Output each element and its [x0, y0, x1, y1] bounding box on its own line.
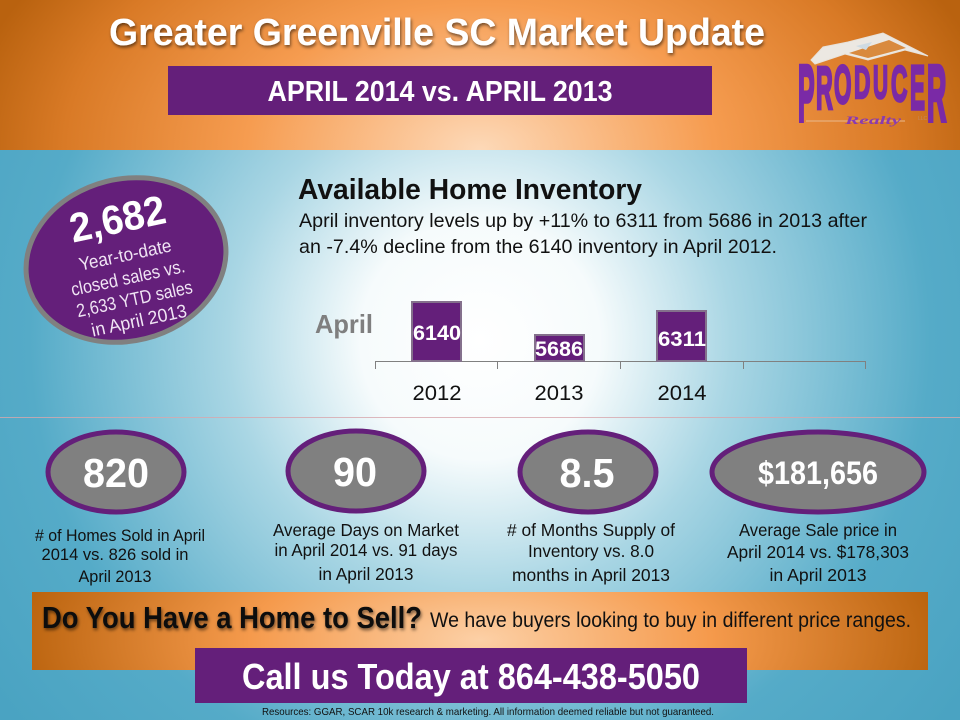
callout text: 2,633 YTD sales	[75, 276, 194, 321]
bar 2012: 6140	[413, 322, 461, 345]
callout text	[64, 232, 199, 343]
bar chart: April inventory	[375, 302, 866, 405]
year labels: 2012	[412, 382, 462, 405]
callout oval: YTD closed sales	[8, 157, 244, 363]
stat: average sale price	[712, 432, 924, 585]
callout text: in April 2013	[89, 300, 189, 340]
heading: available home inventory: Available Home Inventory	[298, 174, 642, 206]
stat: homes sold: 820	[83, 450, 149, 496]
stat: average sale price: $181,656	[758, 455, 878, 491]
banner heading: Do You Have a Home to Sell?	[42, 600, 422, 635]
inventory description: an -7.4% decline from the 6140 inventory in April 2012.	[299, 236, 777, 258]
logo: Producer Realty	[798, 33, 946, 139]
callout text: Year-to-date	[77, 235, 173, 275]
big number: 2,682	[65, 186, 170, 251]
logo: Producer Realty: D	[854, 56, 870, 108]
stat: days on market: Average Days on Market	[273, 520, 459, 540]
stat: homes sold: April 2013	[78, 567, 152, 586]
callout text: closed sales vs.	[69, 255, 187, 300]
logo: Producer Realty: R	[927, 49, 946, 138]
chart label: April: April	[315, 309, 373, 339]
stat: months supply: 8.5	[560, 450, 614, 496]
logo: Producer Realty: Realty	[843, 113, 902, 127]
logo: Producer Realty: LLC	[918, 116, 928, 122]
stat: average sale price: Average Sale price in	[739, 520, 897, 540]
subtitle bar: APRIL 2014 vs. APRIL 2013	[268, 76, 612, 108]
title: Greater Greenville SC Market Update	[109, 12, 765, 54]
year labels: 2013	[534, 382, 584, 405]
logo: Producer Realty: R	[816, 55, 833, 122]
stat: months supply: Inventory vs. 8.0	[528, 541, 654, 561]
stat: average sale price: April 2014 vs. $178,303	[727, 542, 909, 562]
stat: months supply	[507, 432, 675, 585]
logo: Producer Realty: C	[891, 57, 907, 113]
logo: Producer Realty: O	[834, 55, 851, 115]
axis	[375, 361, 866, 369]
footer resources note: Resources: GGAR, SCAR 10k research & marketing. All information deemed reliable but not guaranteed.	[262, 706, 714, 718]
year labels: 2014	[658, 382, 707, 405]
header band	[0, 0, 960, 150]
banner text: We have buyers looking to buy in different price ranges.	[430, 609, 911, 632]
logo: Producer Realty: E	[910, 53, 925, 122]
phone call bar: Call us Today at 864-438-5050	[242, 656, 700, 697]
section divider	[0, 416, 960, 418]
inventory description	[299, 210, 868, 258]
logo: Producer Realty: U	[873, 55, 888, 108]
bar 2014	[657, 311, 706, 361]
stat: days on market: 90	[333, 449, 377, 495]
logo: Producer Realty: P	[798, 48, 815, 139]
stat: average sale price: in April 2013	[770, 565, 866, 585]
bar 2014: 6311	[658, 328, 706, 351]
stat: months supply: months in April 2013	[512, 565, 670, 585]
stat: days on market	[273, 431, 459, 584]
stat: homes sold: # of Homes Sold in April	[35, 526, 205, 545]
inventory description: April inventory levels up by +11% to 6311 from 5686 in 2013 after	[299, 210, 868, 232]
subtitle bar	[168, 66, 712, 115]
year labels	[412, 382, 707, 405]
stat: days on market: in April 2014 vs. 91 days	[274, 540, 458, 560]
phone call bar	[195, 648, 747, 703]
stat: days on market: in April 2013	[318, 564, 414, 584]
stat: homes sold	[35, 432, 205, 586]
bar 2013: 5686	[535, 338, 583, 361]
stat: homes sold: 2014 vs. 826 sold in	[42, 545, 188, 564]
call to action banner	[32, 592, 928, 670]
stat: months supply: # of Months Supply of	[507, 520, 675, 540]
bar 2012	[412, 302, 461, 361]
